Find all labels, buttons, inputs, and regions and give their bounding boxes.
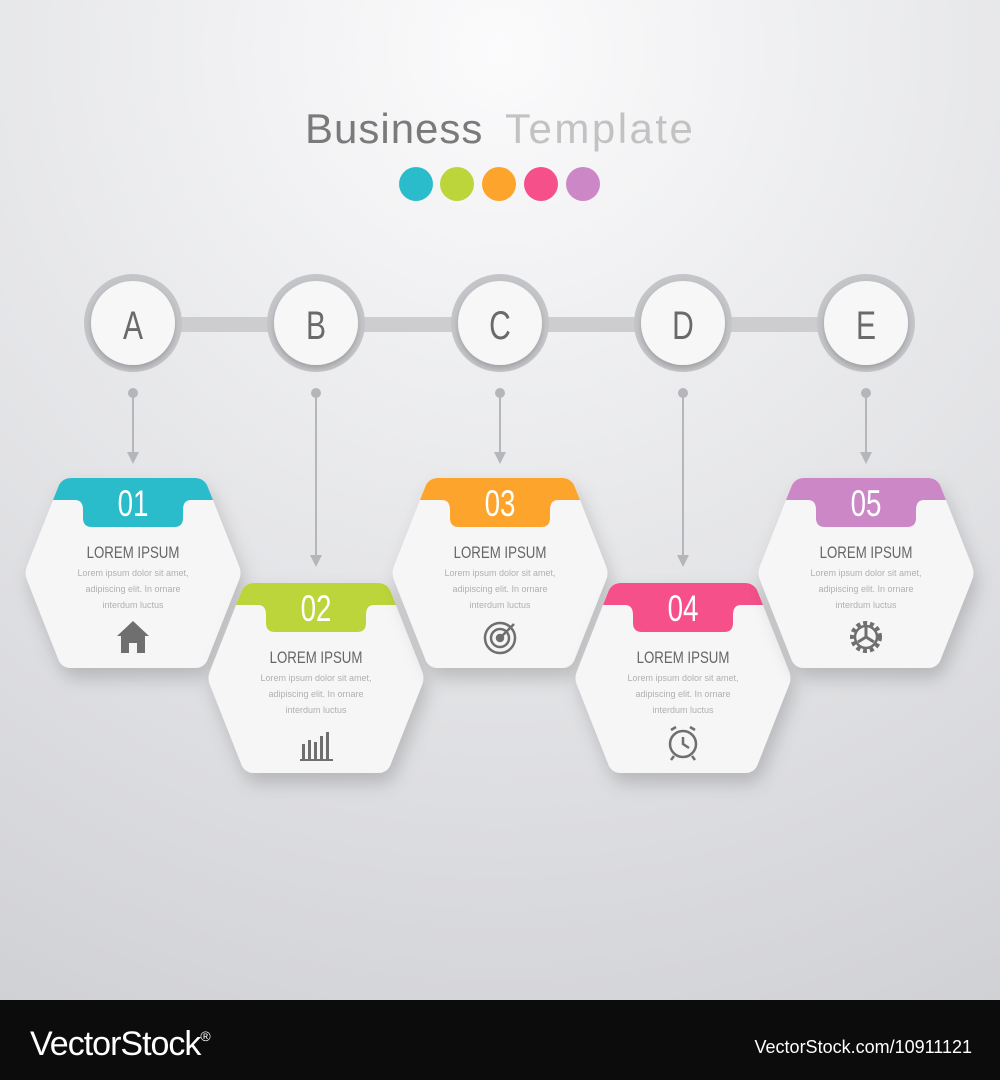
card 05: LOREM IPSUM — [820, 544, 912, 562]
title: Template — [505, 105, 695, 152]
card 02: LOREM IPSUM — [270, 649, 362, 667]
card 03: Lorem ipsum dolor sit amet, — [444, 568, 556, 578]
step circles: B — [306, 304, 326, 348]
card 05: Lorem ipsum dolor sit amet, — [810, 568, 922, 578]
card 03 — [392, 478, 608, 668]
card 05 — [758, 478, 974, 668]
step circles — [84, 274, 915, 372]
step circles: E — [856, 304, 876, 348]
card 05: adipiscing elit. In ornare — [818, 584, 914, 594]
title: Business — [305, 105, 483, 152]
card 04: LOREM IPSUM — [637, 649, 729, 667]
card 01: interdum luctus — [102, 600, 164, 610]
color dots — [399, 167, 600, 201]
card 01: 01 — [118, 482, 148, 524]
footer bar: ® — [200, 1028, 211, 1044]
card 02: interdum luctus — [285, 705, 347, 715]
card 01 — [26, 478, 240, 668]
step circles: C — [489, 304, 511, 348]
card 04: adipiscing elit. In ornare — [635, 689, 731, 699]
card 03: 03 — [485, 482, 515, 524]
card 02: adipiscing elit. In ornare — [268, 689, 364, 699]
card 01: Lorem ipsum dolor sit amet, — [77, 568, 189, 578]
card 03: adipiscing elit. In ornare — [452, 584, 548, 594]
card 02 — [208, 583, 424, 773]
card 03: LOREM IPSUM — [454, 544, 546, 562]
step circles: D — [672, 304, 694, 348]
title — [305, 105, 695, 152]
step circles: A — [123, 304, 143, 348]
card 01: adipiscing elit. In ornare — [85, 584, 181, 594]
connector bar — [133, 317, 866, 332]
card 04: 04 — [668, 587, 698, 629]
footer bar — [0, 1000, 1000, 1080]
card 02: 02 — [301, 587, 331, 629]
card 04 — [576, 583, 790, 773]
card 02: Lorem ipsum dolor sit amet, — [260, 673, 372, 683]
footer bar: VectorStock — [30, 1025, 200, 1063]
card 04: interdum luctus — [652, 705, 714, 715]
footer bar: VectorStock.com/10911121 — [755, 1037, 972, 1057]
card 01: LOREM IPSUM — [87, 544, 179, 562]
card 03: interdum luctus — [469, 600, 531, 610]
card 04: Lorem ipsum dolor sit amet, — [627, 673, 739, 683]
arrows — [127, 388, 872, 567]
card 05: interdum luctus — [835, 600, 897, 610]
card 05: 05 — [851, 482, 881, 524]
